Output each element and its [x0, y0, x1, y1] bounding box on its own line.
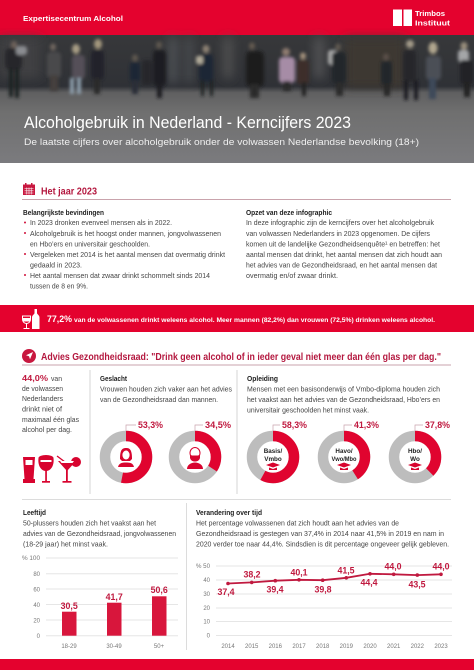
line chart: verandering over tijd: 2017 [292, 644, 306, 650]
line chart: verandering over tijd: 2014 [221, 644, 235, 650]
text block: leeftijd: 50-plussers houden zich het vaakst aan het [23, 518, 156, 528]
text block: 44,0%: de volwassen [22, 384, 63, 393]
bar chart: leeftijd: 50,6 [151, 585, 168, 595]
text block: leeftijd: (18-29 jaar) het minst vaak. [23, 540, 108, 548]
line chart: verandering over tijd: 2019 [340, 644, 354, 650]
text block: opzet van deze infographic: van volwassen Nederlanders in 2023 opgenomen. De cijfers [246, 229, 430, 238]
line chart: verandering over tijd: 44,4 [360, 578, 378, 588]
text block: belangrijkste bevindingen: Vergeleken met 2014 is het aantal mensen dat overmatig drinkt [30, 250, 225, 259]
section: Advies Gezondheidsraad [22, 349, 451, 494]
text block: verandering over tijd: Gezondheidsraad is gestegen van 37,4% in 2014 naar 41,5% in 2019 en nam in [196, 529, 444, 538]
text block: belangrijkste bevindingen [23, 208, 225, 290]
text block: 44,0%: alcohol per dag. [22, 425, 72, 434]
line chart: verandering over tijd: 2018 [316, 644, 330, 650]
logo: Trimbos Instituut: Trimbos [415, 9, 445, 18]
donut: Basis/Vmbo 58,3% [252, 420, 307, 478]
bar chart: leeftijd: 18-29 [61, 644, 77, 650]
text block: belangrijkste bevindingen: gedaald in 2023. [30, 260, 82, 270]
line chart: verandering over tijd [196, 562, 452, 650]
donut: Hbo/Wo 37,8%: Wo [410, 456, 420, 463]
donut: Havo/Vwo/Mbo 41,3%: 41,3% [354, 420, 379, 430]
text block: verandering over tijd [196, 508, 449, 548]
donut: vrouwen 53,3%: 53,3% [138, 420, 163, 430]
line chart: verandering over tijd: 38,2 [243, 570, 261, 580]
hero photo: blurred crowd with title [0, 35, 474, 163]
bar chart: leeftijd: 50+ [154, 644, 165, 650]
line chart: verandering over tijd: 30 [203, 592, 211, 598]
text block: leeftijd: advies van de Gezondheidsraad, jongvolwassenen [23, 529, 176, 538]
text block: opzet van deze infographic: aantal mensen dat drinkt, het aantal mensen dat zich houdt aan [246, 250, 442, 259]
line chart: verandering over tijd: 10 [203, 620, 211, 626]
text block: verandering over tijd: Verandering over tijd [196, 508, 262, 517]
header bar [0, 0, 474, 35]
donut: Hbo/Wo 37,8%: 37,8% [425, 420, 450, 430]
donut: Basis/Vmbo 58,3%: 58,3% [282, 420, 307, 430]
donut: vrouwen 53,3% [105, 420, 163, 478]
text block: opleiding: universitair geschoolden het minst vaak. [247, 406, 369, 414]
donut: Havo/Vwo/Mbo 41,3% [323, 420, 379, 478]
text block: opleiding: Mensen met een basisonderwijs of Vmbo-diploma houden zich [247, 384, 440, 394]
text block: 44,0%: drinkt niet of [22, 404, 63, 414]
donut: Hbo/Wo 37,8%: Hbo/ [408, 448, 422, 455]
text block: geslacht [100, 374, 232, 404]
text block: geslacht: van de Gezondheidsraad dan mannen. [100, 395, 218, 404]
icon: wine glass and bottle [22, 309, 40, 329]
text block: belangrijkste bevindingen: Het aantal mensen dat zwaar drinkt schommelt sinds 2014 [30, 271, 210, 280]
line chart: verandering over tijd: 2015 [245, 644, 259, 650]
line chart: verandering over tijd: 39,4 [266, 584, 284, 594]
line chart: verandering over tijd: 2022 [411, 644, 425, 650]
text block: leeftijd: Leeftijd [23, 508, 46, 517]
text block: 44,0% [22, 373, 79, 434]
red banner: 77,2% drinks alcohol [0, 305, 474, 332]
bar chart: leeftijd: 30,5 [61, 601, 78, 611]
text block: 44,0%: Nederlanders [22, 394, 63, 403]
bar chart: leeftijd: 60 [33, 587, 41, 593]
line chart: verandering over tijd: 40,1 [290, 568, 308, 578]
text block: opzet van deze infographic: overmatig en/of zwaar drinkt. [246, 271, 338, 280]
line chart: verandering over tijd: 2021 [387, 644, 401, 650]
text block: opzet van deze infographic: In deze infographic zijn de kerncijfers over het alcoholgebruik [246, 218, 434, 227]
text block: verandering over tijd: 2020 verder toe naar 44,4%. Sindsdien is dit percentage ongeveer gelijk gebleven. [196, 540, 449, 548]
text block: opzet van deze infographic: Opzet van deze infographic [246, 208, 332, 217]
donut: Basis/Vmbo 58,3%: Basis/ [264, 448, 283, 455]
line chart: verandering over tijd: 0 [207, 634, 211, 640]
text block: 44,0%: maximaal één glas [22, 415, 79, 424]
bar chart: leeftijd: 40 [33, 603, 41, 609]
footer bar [0, 659, 474, 670]
text block: 44,0%: 44,0% [22, 373, 48, 383]
text block: verandering over tijd: Het percentage volwassenen dat zich houdt aan het advies van de [196, 518, 399, 528]
donut: Hbo/Wo 37,8% [394, 420, 450, 478]
bar chart: leeftijd: 80 [33, 572, 41, 578]
line chart: verandering over tijd: 39,8 [314, 584, 332, 594]
text block: geslacht: Geslacht [100, 374, 127, 383]
main title: Alcoholgebruik in Nederland - Kerncijfers 2023 [24, 114, 351, 132]
text block: leeftijd [23, 508, 176, 548]
text block: opleiding: het vaakst aan het advies van de Gezondheidsraad, Hbo’ers en [247, 395, 440, 404]
banner text [47, 314, 435, 324]
line chart: verandering over tijd: 20 [203, 606, 211, 612]
text block: geslacht: Vrouwen houden zich vaker aan het advies [100, 384, 232, 394]
text block: 44,0%: van [51, 374, 62, 383]
line chart: verandering over tijd: 40 [203, 578, 211, 584]
donut: Basis/Vmbo 58,3%: Vmbo [264, 456, 282, 463]
text block: belangrijkste bevindingen: tussen de 8 en 9%. [30, 282, 88, 290]
line chart: verandering over tijd: % 50 [196, 564, 211, 570]
icon: beer, wine and cocktail glasses [23, 455, 81, 483]
bar chart: leeftijd: 30-49 [106, 644, 122, 650]
donut: Havo/Vwo/Mbo 41,3%: Havo/ [335, 448, 353, 455]
icon: compass arrow [22, 349, 36, 363]
line chart: verandering over tijd: 37,4 [217, 587, 235, 597]
line chart: verandering over tijd: 44,0 [384, 562, 402, 572]
icon: calendar [23, 183, 35, 195]
subtitle: De laatste cijfers over alcoholgebruik onder de volwassen Nederlandse bevolking (18+) [24, 137, 419, 148]
text block: opleiding: Opleiding [247, 374, 278, 383]
line chart: verandering over tijd: 43,5 [408, 580, 426, 590]
logo: Trimbos Instituut: Instituut [415, 18, 451, 28]
heading: Het jaar 2023: Het jaar 2023 [41, 186, 98, 198]
text block: opleiding [247, 374, 440, 414]
text block: belangrijkste bevindingen: In 2023 dronken evenveel mensen als in 2022. [30, 218, 172, 227]
text block: belangrijkste bevindingen: Alcoholgebruik is het hoogst onder mannen, jongvolwassenen [30, 229, 221, 238]
bar chart: leeftijd: 20 [33, 618, 41, 624]
line chart: verandering over tijd: 44,0 [432, 562, 450, 572]
donut: mannen 34,5%: 34,5% [205, 420, 231, 430]
banner text: van de volwassenen drinkt weleens alcohol. Meer mannen (82,2%) dan vrouwen (72,5%) drinken weleens alcohol. [74, 317, 435, 324]
line chart: verandering over tijd: 2020 [363, 644, 377, 650]
organisation label: Expertisecentrum Alcohol [23, 14, 123, 23]
text block: opzet van deze infographic: komen uit de landelijke Gezondheidsenquête¹ en betreffen: het [246, 240, 440, 248]
bar chart: leeftijd: % 100 [22, 556, 41, 562]
banner text: 77,2% [47, 314, 72, 324]
line chart: verandering over tijd: 2016 [269, 644, 283, 650]
bar chart: leeftijd: 0 [37, 634, 41, 640]
donut: mannen 34,5% [174, 420, 231, 478]
text block: belangrijkste bevindingen: Belangrijkste bevindingen [23, 208, 104, 217]
bar chart: leeftijd: 41,7 [106, 592, 123, 602]
bar chart: leeftijd [22, 556, 178, 650]
section: Het jaar 2023 [22, 183, 451, 290]
text block: opzet van deze infographic: het advies van de Gezondheidsraad, en het aantal mensen dat [246, 260, 437, 270]
text block: opzet van deze infographic [246, 208, 442, 280]
heading: advies: Advies Gezondheidsraad: "Drink geen alcohol of in ieder geval niet meer dan één glas per dag." [41, 352, 441, 363]
line chart: verandering over tijd: 2023 [434, 644, 448, 650]
text block: belangrijkste bevindingen: en Hbo’ers en universitair geschoolden. [30, 240, 150, 248]
donut: Havo/Vwo/Mbo 41,3%: Vwo/Mbo [332, 456, 357, 463]
line chart: verandering over tijd: 41,5 [337, 566, 355, 576]
logo: Trimbos Instituut [393, 9, 451, 28]
